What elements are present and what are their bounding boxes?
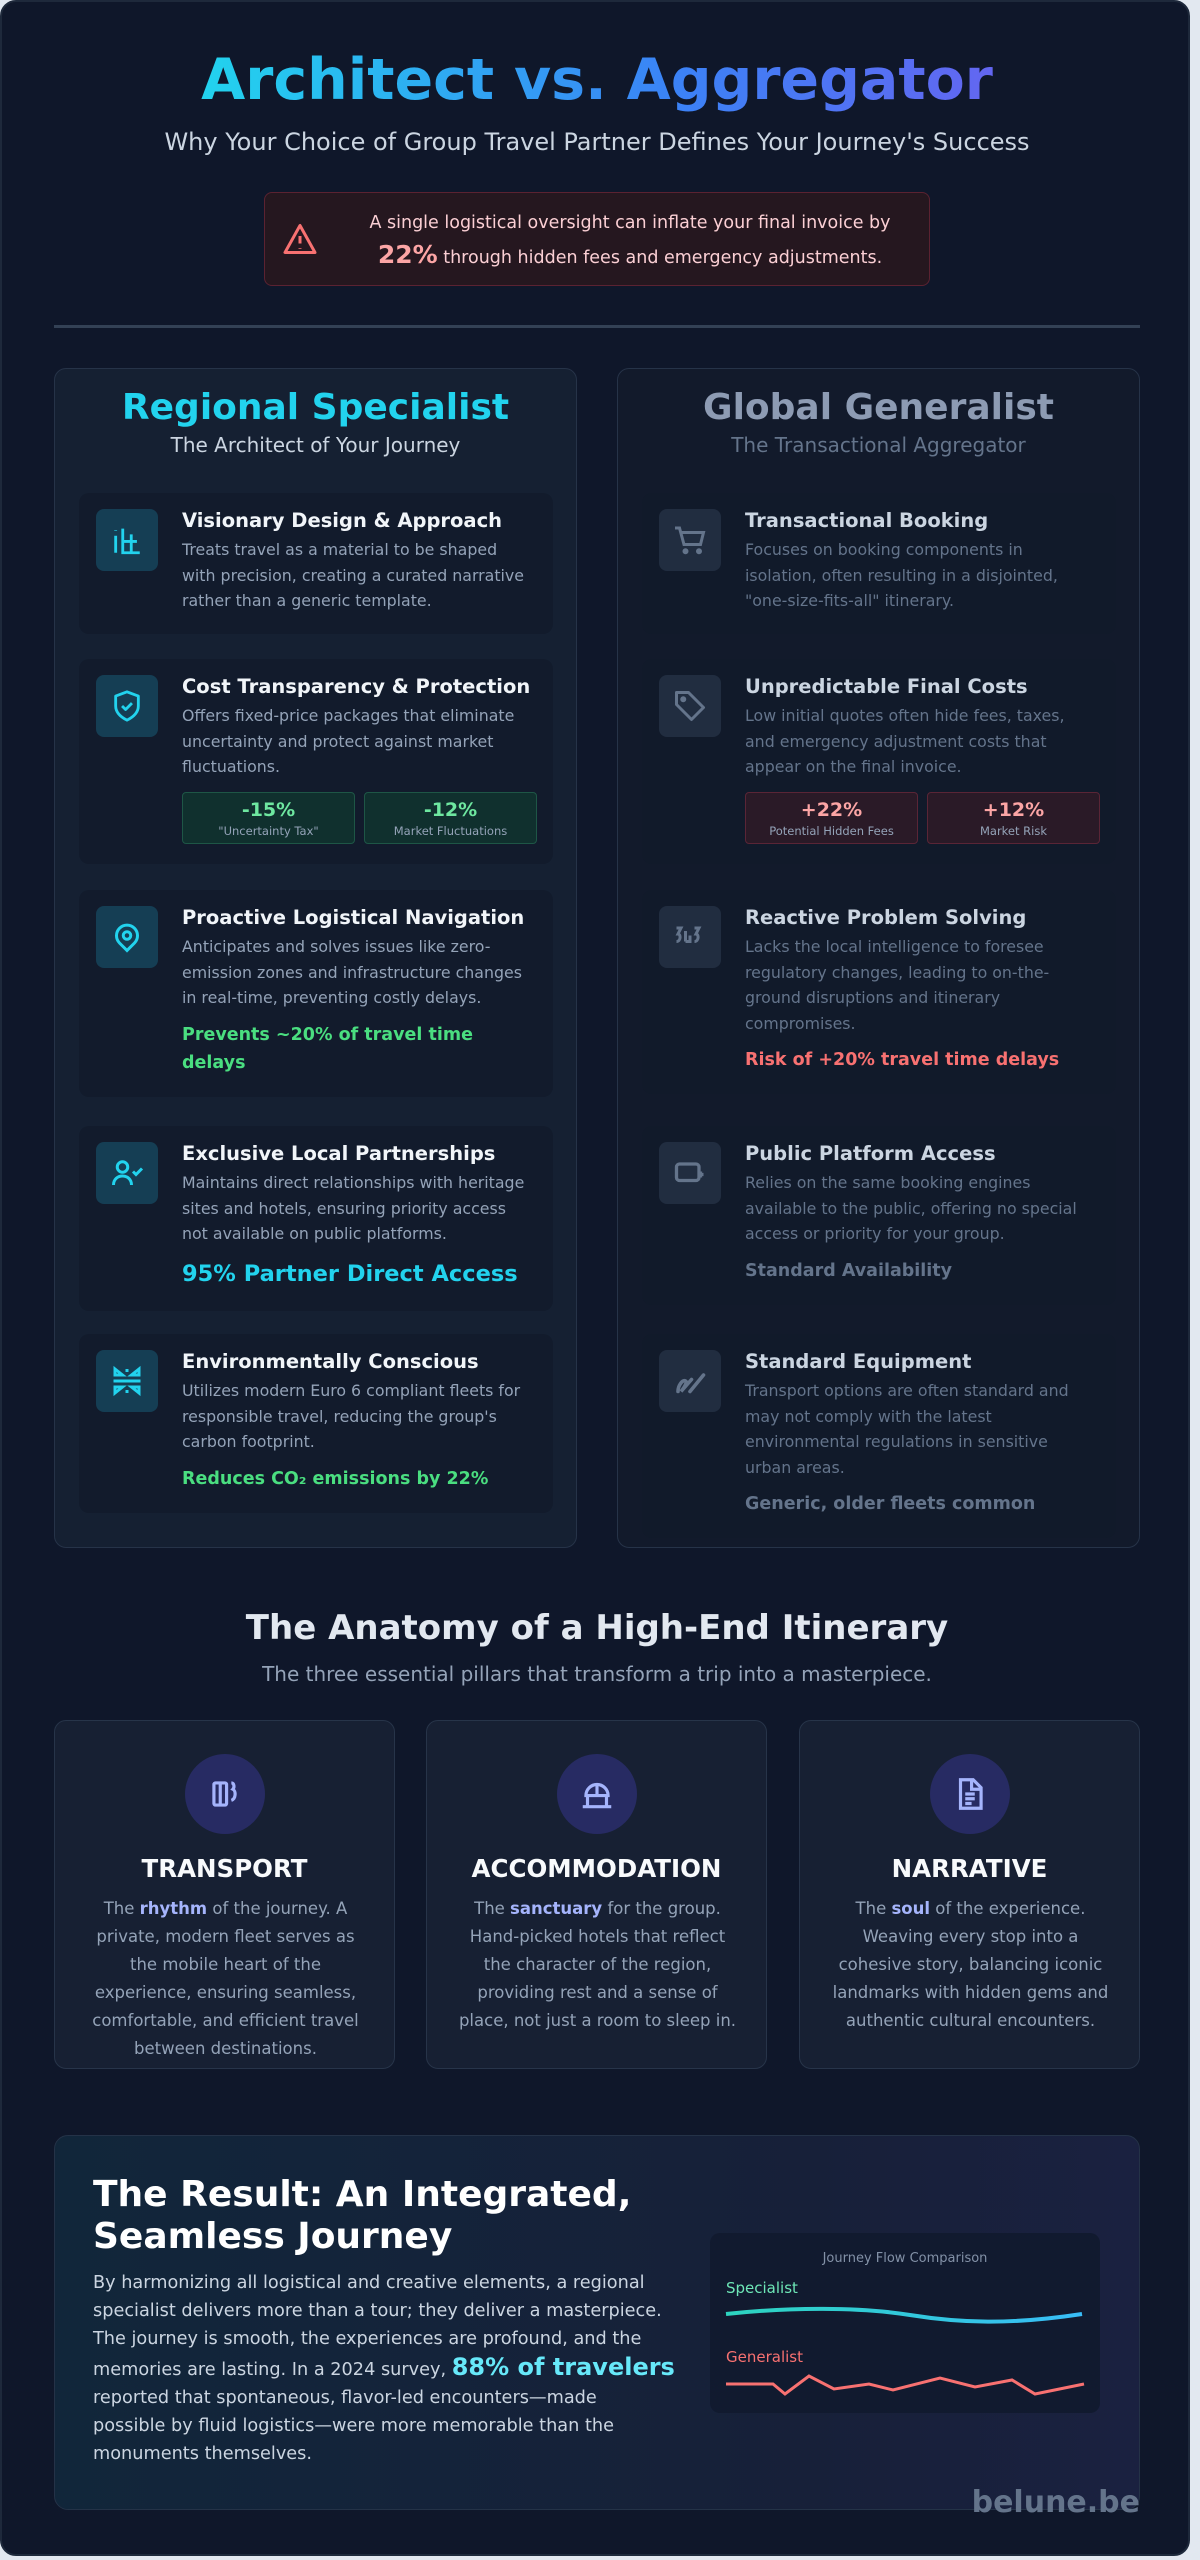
item: exclusive partnerships: 95% Partner Direct Access [182,1260,518,1286]
card: transport: TRANSPORT [142,1854,307,1883]
item: environmentally conscious: Utilizes modern Euro 6 compliant fleets for responsible travel, reducing the group's carbon footprint. [182,1381,520,1451]
item: standard equipment: Generic, older fleets common [745,1494,1035,1514]
item: exclusive partnerships [79,1126,553,1310]
icon: tag [659,675,721,737]
item: unpredictable costs [642,659,1116,864]
item: public platform: Relies on the same booking engines available to the public, offering no special access or priority for your group. [745,1173,1077,1243]
icon: reactive [659,906,721,968]
result body text: By harmonizing all logistical and creative elements, a regional specialist delivers more than a tour; they deliver a masterpiece. The journey is smooth, the experiences are profound, and the memories are lasting. In a 2024 survey, 88% of travelers reported that spontaneous, flavor-led encounters—made [93,2273,675,2408]
card: narrative [799,1720,1140,2069]
item: cost transparency: Offers fixed-price packages that eliminate uncertainty and protect against market fluctuations. [182,706,514,776]
item: public platform: Standard Availability [745,1260,952,1280]
icon: design [96,509,158,571]
item: standard equipment [642,1334,1116,1538]
item: visionary design [79,493,553,634]
chart: journey flow comparison: Journey Flow Comparison [822,2251,987,2266]
heading: anatomy: The Anatomy of a High-End Itinerary [246,1608,948,1648]
card: narrative: The soul of the experience. Weaving every stop into a cohesive story, balancing iconic landmarks with hidden gems and authentic cultural encounters. [833,1899,1108,2030]
stat boxes: +12% [983,798,1044,820]
item: transactional booking: Focuses on booking components in isolation, often resulting in a disjointed, "one-size-fits-all" itinerary. [745,540,1058,610]
item: unpredictable costs: Unpredictable Final Costs [745,675,1028,698]
item: standard equipment: Transport options are often standard and may not comply with the latest environmental regulations in sensitive urban areas. [745,1381,1069,1476]
card: accommodation [426,1720,767,2069]
item: public platform [642,1126,1116,1304]
item: environmentally conscious: Reduces CO₂ emissions by 22% [182,1468,488,1488]
item: visionary design: Visionary Design & Approach [182,509,502,532]
panel subheading: The Transactional Aggregator [731,433,1026,457]
item: proactive navigation: Anticipates and solves issues like zero-emission zones and infrastructure changes in real-time, preventing costly delays. [182,937,522,1007]
icon: cart [659,509,721,571]
item: cost transparency: Cost Transparency & Protection [182,675,530,698]
icon: warning [283,224,316,254]
icon: pen [659,1350,721,1412]
item: proactive navigation: Proactive Logistical Navigation [182,906,524,929]
card: accommodation: The sanctuary for the group. Hand-picked hotels that reflect the character of the region, providing rest and a sense of place, not just a room to sleep in. [459,1899,736,2030]
icon: screen [659,1142,721,1204]
item: visionary design: Treats travel as a material to be shaped with precision, creating a curated narrative rather than a generic template. [182,540,524,610]
icon: user check [96,1142,158,1204]
item: exclusive partnerships: Maintains direct relationships with heritage sites and hotels, ensuring priority access not available on public platforms. [182,1173,524,1243]
alert text: A single logistical oversight can inflate your final invoice by 22% through hidden fees and emergency adjustments. [369,213,891,269]
stat boxes: Market Risk [980,824,1047,838]
chart: journey flow comparison [710,2233,1100,2413]
stat boxes [745,792,1100,844]
panel: regional specialist [54,368,577,1548]
title: Architect vs. Aggregator [201,47,993,113]
item: environmentally conscious [79,1334,553,1512]
stat boxes: +22% [801,798,862,820]
stat boxes: Potential Hidden Fees [769,824,894,838]
result body text: possible by fluid logistics—were more memorable than the monuments themselves. [93,2416,614,2464]
icon: transport [185,1754,265,1834]
item: standard equipment: Standard Equipment [745,1350,971,1373]
panel heading: Global Generalist [703,387,1054,428]
item: environmentally conscious: Environmentally Conscious [182,1350,479,1373]
stat boxes [182,792,537,844]
item: reactive problem solving: Risk of +20% travel time delays [745,1050,1059,1070]
subtitle: Why Your Choice of Group Travel Partner Defines Your Journey's Success [164,128,1030,156]
item: public platform: Public Platform Access [745,1142,996,1165]
icon: accommodation [557,1754,637,1834]
result heading: The Result: An Integrated, Seamless Journey [93,2174,631,2257]
icon: shield [96,675,158,737]
stat boxes: Market Fluctuations [394,824,507,838]
panel heading: Regional Specialist [122,387,509,428]
item: cost transparency [79,659,553,864]
chart: journey flow comparison: Specialist [726,2279,798,2297]
chart: journey flow comparison: Generalist [726,2348,803,2366]
item: reactive problem solving: Reactive Problem Solving [745,906,1026,929]
icon: eco [96,1350,158,1412]
card: transport [54,1720,395,2069]
item: reactive problem solving [642,890,1116,1094]
stat boxes: -15% [242,798,295,820]
item: proactive navigation [79,890,553,1096]
stat boxes: -12% [424,798,477,820]
card: narrative: NARRATIVE [892,1854,1047,1883]
subheading: anatomy: The three essential pillars that transform a trip into a masterpiece. [262,1662,932,1686]
panel: global generalist [617,368,1140,1548]
item: exclusive partnerships: Exclusive Local Partnerships [182,1142,495,1165]
item: transactional booking [642,493,1116,634]
item: unpredictable costs: Low initial quotes often hide fees, taxes, and emergency adjustment costs that appear on the final invoice. [745,706,1065,776]
item: transactional booking: Transactional Booking [745,509,988,532]
icon: location [96,906,158,968]
panel subheading: The Architect of Your Journey [171,433,460,457]
panel: result [54,2135,1140,2510]
icon: document [930,1754,1010,1834]
brand: belune.be: belune.be [972,2485,1140,2520]
card: transport: The rhythm of the journey. A private, modern fleet serves as the mobile heart of the experience, ensuring seamless, comfortable, and efficient travel between destinations. [92,1899,359,2058]
stat boxes: "Uncertainty Tax" [218,824,319,838]
item: reactive problem solving: Lacks the local intelligence to foresee regulatory changes, leading to on-the-ground disruptions and itinerary compromises. [745,937,1049,1032]
alert callout [264,192,930,286]
card: accommodation: ACCOMMODATION [472,1854,721,1883]
item: proactive navigation: Prevents ~20% of travel time delays [182,1024,473,1072]
